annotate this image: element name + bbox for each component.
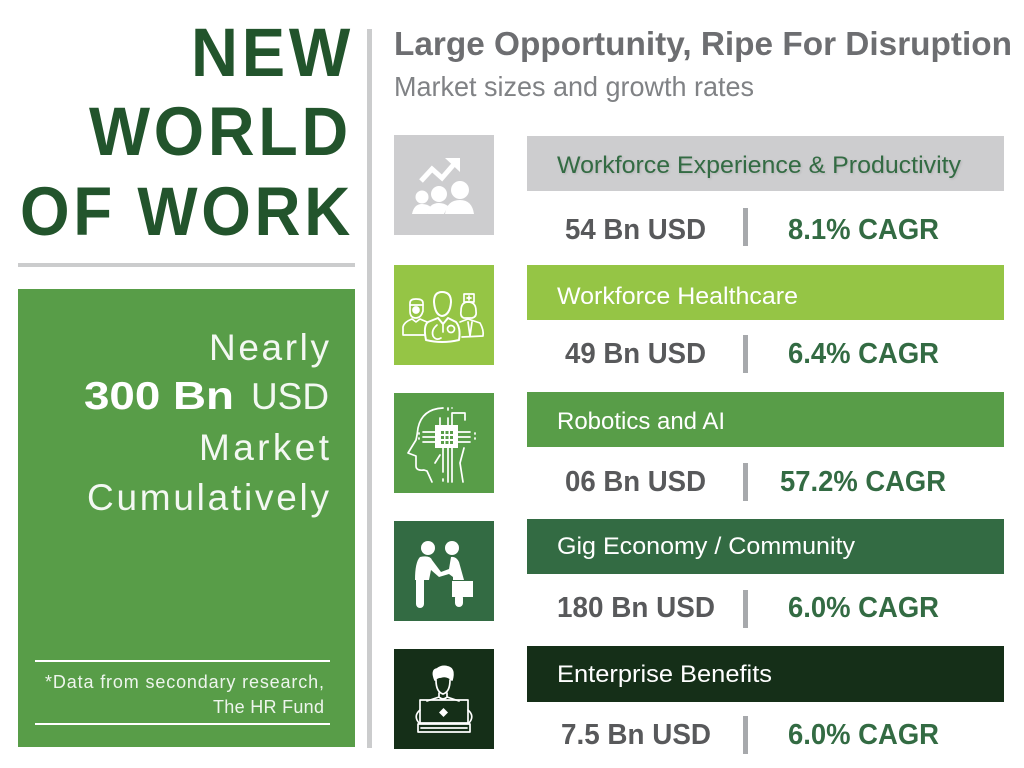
- title: New World of Work: [20, 14, 354, 250]
- banner: [527, 519, 1004, 574]
- growth rate: 6.4% CAGR: [788, 338, 939, 370]
- footnote: [35, 660, 330, 725]
- icon: medical staff: [394, 265, 494, 365]
- summary text: Cumulatively: [87, 477, 330, 518]
- row: robotics and AI: [394, 392, 1004, 501]
- heading: Large Opportunity, Ripe For Disruption: [394, 25, 1012, 62]
- summary text: 300 Bn: [84, 375, 234, 418]
- subheading: Market sizes and growth rates: [394, 71, 754, 102]
- growth rate: 6.0% CAGR: [788, 719, 939, 751]
- footnote: *Data from secondary research,: [45, 672, 324, 692]
- row: enterprise benefits: [394, 646, 1004, 754]
- title: New World of Work: OF WORK: [20, 173, 354, 250]
- banner: [527, 136, 1004, 191]
- title: New World of Work: NEW: [191, 14, 354, 91]
- banner label: Gig Economy / Community: [557, 533, 855, 560]
- market size: 54 Bn USD: [565, 214, 706, 246]
- footnote: The HR Fund: [213, 697, 324, 717]
- banner label: Workforce Experience & Productivity: [557, 152, 961, 179]
- growth rate: 8.1% CAGR: [788, 214, 939, 246]
- market size: 180 Bn USD: [557, 592, 715, 624]
- summary text: [84, 327, 330, 518]
- summary text: Market: [199, 427, 330, 468]
- banner label: Robotics and AI: [557, 408, 725, 435]
- market size: 06 Bn USD: [565, 466, 706, 498]
- banner: [527, 392, 1004, 447]
- icon: person with laptop: [394, 649, 494, 749]
- market size: 7.5 Bn USD: [561, 719, 711, 751]
- panel: market summary: [18, 289, 355, 747]
- banner: [527, 646, 1004, 702]
- banner: [527, 265, 1004, 320]
- growth rate: 57.2% CAGR: [780, 466, 946, 498]
- banner label: Workforce Healthcare: [557, 283, 798, 310]
- summary text: Nearly: [209, 327, 330, 368]
- market size: 49 Bn USD: [565, 338, 706, 370]
- row: gig economy: [394, 519, 1004, 628]
- row: workforce experience: [394, 135, 1004, 246]
- growth rate: 6.0% CAGR: [788, 592, 939, 624]
- row: workforce healthcare: [394, 265, 1004, 373]
- title: New World of Work: WORLD: [89, 93, 352, 170]
- banner label: Enterprise Benefits: [557, 661, 772, 688]
- icon: head with chip: [394, 393, 494, 493]
- icon: growth and people: [394, 135, 494, 235]
- icon: handshake: [394, 521, 494, 621]
- summary text: USD: [251, 376, 329, 417]
